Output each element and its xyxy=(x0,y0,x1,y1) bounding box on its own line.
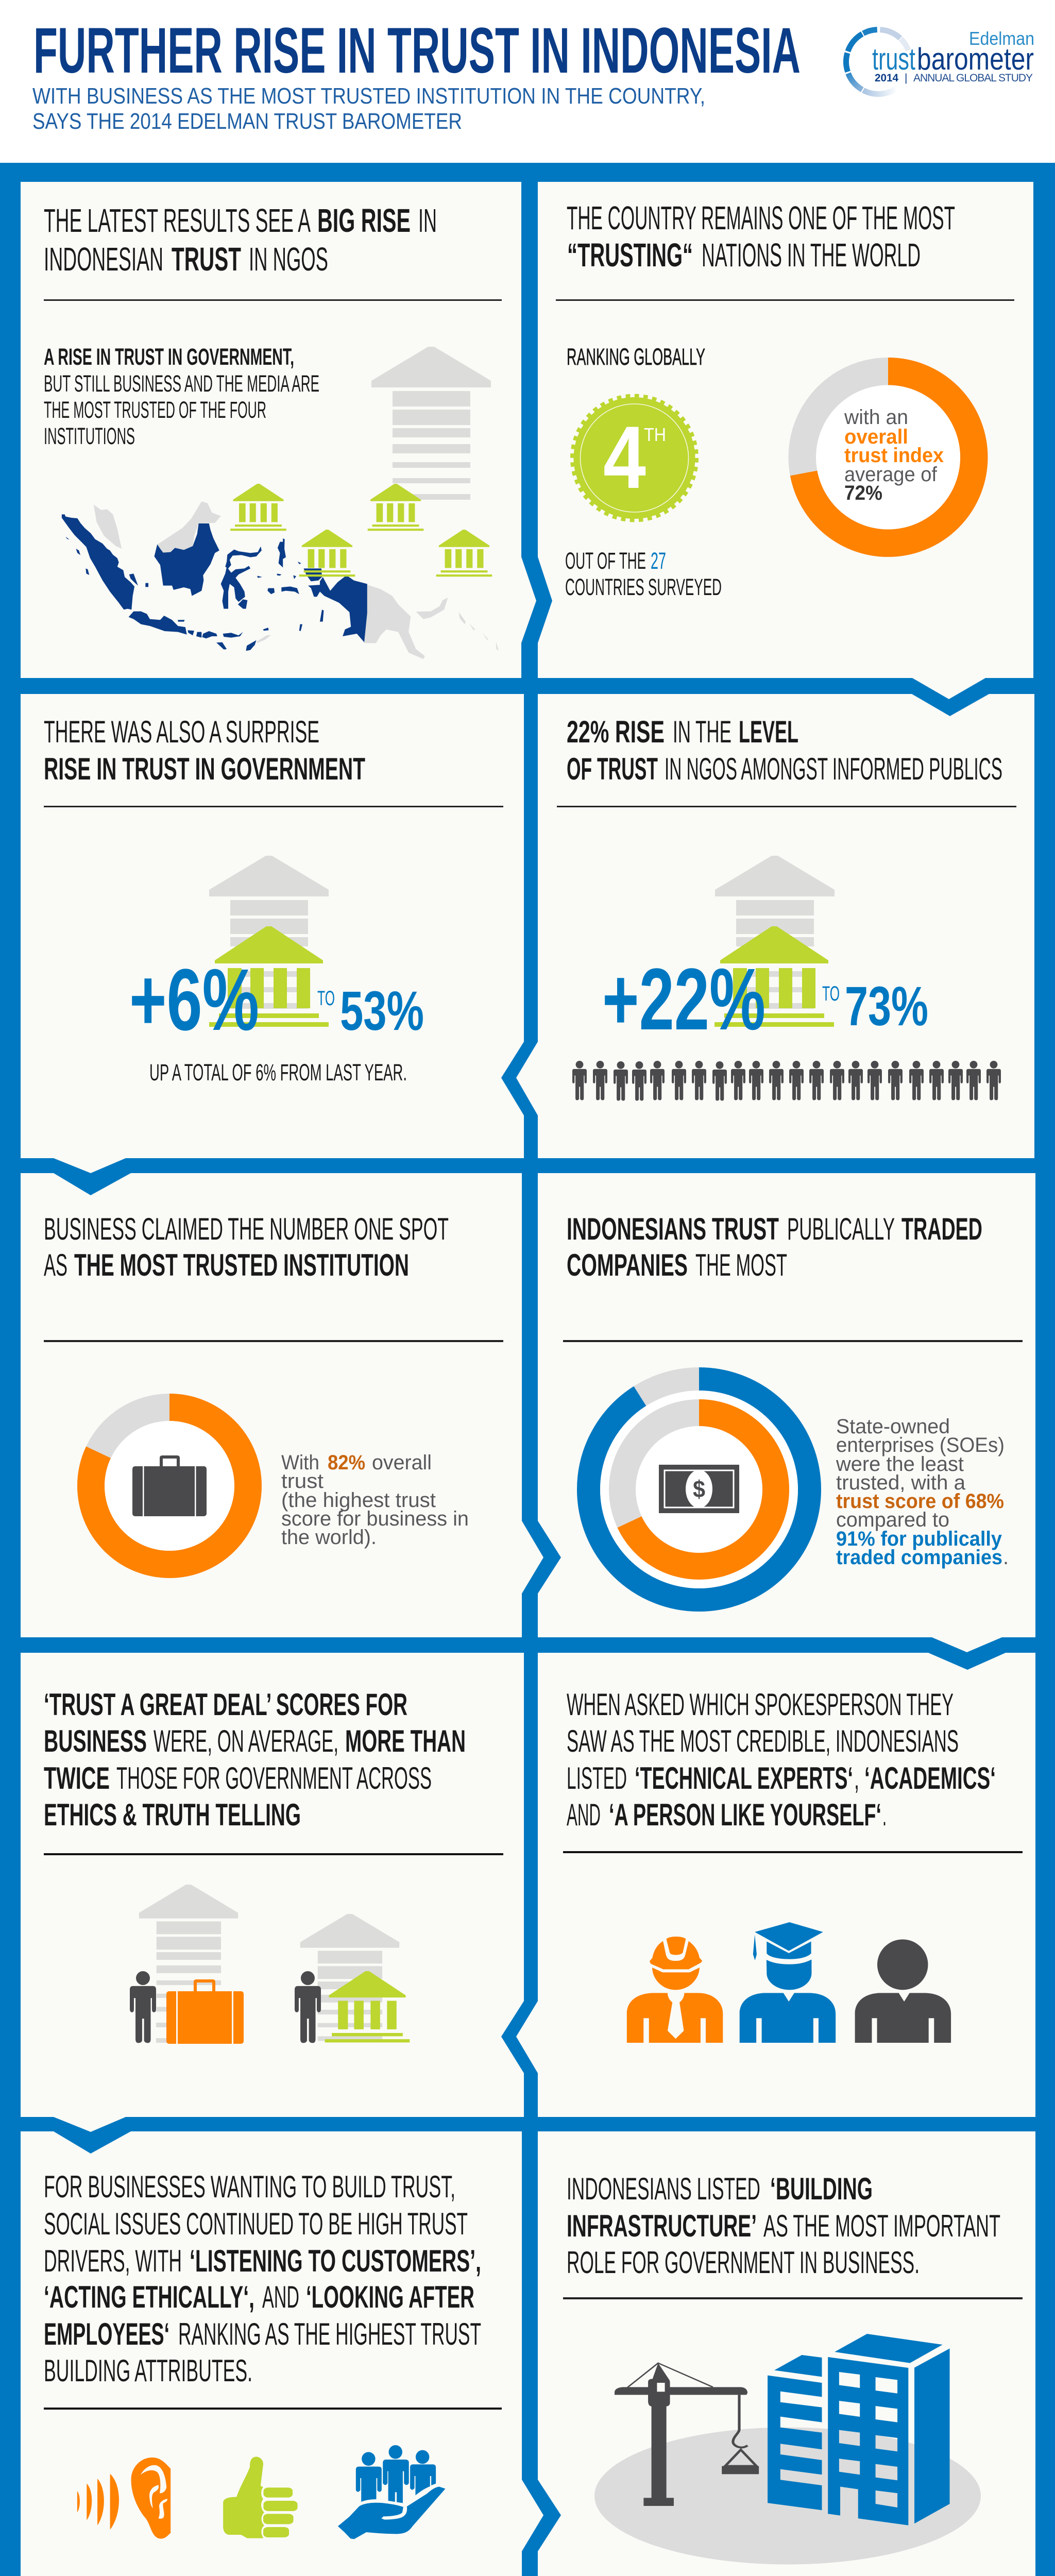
heading: 22% RISE xyxy=(567,715,665,749)
body text: BUT STILL BUSINESS AND THE MEDIA ARE xyxy=(44,370,319,397)
logo wordmark: 2014 xyxy=(875,72,898,84)
chart note: enterprises (SOEs) xyxy=(836,1434,1005,1456)
heading: RANKING AS THE HIGHEST TRUST xyxy=(178,2317,481,2351)
header background xyxy=(0,0,1055,163)
panel: trusting nations xyxy=(538,182,1033,699)
panel: rise in trust in NGOs among informed publics xyxy=(516,694,1034,1158)
stat: +6% to 53% xyxy=(129,951,424,1049)
heading: ‘LISTENING TO CUSTOMERS’, xyxy=(190,2244,481,2278)
panel background xyxy=(21,1173,543,1637)
panel background xyxy=(538,2131,1035,2576)
icons: crane and office building xyxy=(615,2334,950,2526)
gray arrow xyxy=(300,1914,399,2041)
heading xyxy=(44,1212,449,1282)
donut note: the world). xyxy=(281,1526,377,1549)
panel background xyxy=(21,182,536,678)
stat: +6% to 53%: 53% xyxy=(340,979,424,1042)
heading: , xyxy=(854,1761,859,1795)
heading xyxy=(567,1687,996,1832)
person xyxy=(130,1971,156,2043)
icon: briefcase xyxy=(132,1455,207,1516)
heading: . xyxy=(882,1798,887,1832)
heading: THE MOST xyxy=(695,1248,787,1282)
logo ring xyxy=(846,30,908,94)
stat: +6% to 53%: TO xyxy=(317,987,335,1010)
stat: +6% to 53%: +6% xyxy=(129,951,259,1049)
icon: crane xyxy=(615,2363,759,2506)
heading xyxy=(44,202,437,278)
heading: AS xyxy=(44,1248,67,1282)
donut label: average of xyxy=(844,463,938,486)
ranking label: RANKING GLOBALLY xyxy=(567,344,705,370)
stat: +22% to 73%: 73% xyxy=(845,975,928,1037)
heading: ‘A PERSON LIKE YOURSELF‘ xyxy=(609,1798,881,1832)
note: out of 27 countries: COUNTRIES SURVEYED xyxy=(565,574,722,600)
stat: +22% to 73%: TO xyxy=(822,982,840,1005)
panel background xyxy=(538,182,1033,699)
heading xyxy=(567,2172,1000,2280)
icon: gray rising arrow xyxy=(371,347,491,500)
heading: AND xyxy=(567,1798,601,1832)
chart note: traded companies xyxy=(836,1546,1002,1569)
icon: banknote: $ xyxy=(693,1476,705,1502)
icons: spokespeople xyxy=(627,1922,951,2043)
icon row: informed public people xyxy=(572,1061,1001,1100)
heading: IN THE xyxy=(673,715,731,749)
logo wordmark: ANNUAL GLOBAL STUDY xyxy=(913,72,1033,84)
person xyxy=(295,1971,321,2043)
donut label xyxy=(844,406,944,504)
heading: INDONESIANS LISTED xyxy=(567,2172,760,2206)
heading: TRADED xyxy=(901,1212,982,1246)
panel background xyxy=(538,1173,1035,1652)
caption: UP A TOTAL OF 6% FROM LAST YEAR. xyxy=(149,1059,407,1086)
panel background xyxy=(516,694,1034,1158)
icons: ear, thumb, caring hand xyxy=(77,2445,446,2539)
heading: LISTED xyxy=(567,1761,627,1795)
heading: ETHICS & TRUTH TELLING xyxy=(44,1798,301,1832)
donut note: score for business in xyxy=(281,1507,469,1530)
heading: EMPLOYEES‘ xyxy=(44,2317,169,2351)
heading: THE LATEST RESULTS SEE A xyxy=(44,202,311,239)
logo wordmark: Edelman xyxy=(969,28,1034,49)
heading: PUBLICALLY xyxy=(787,1212,895,1246)
heading: ‘TECHNICAL EXPERTS‘ xyxy=(635,1761,853,1795)
chart note: were the least xyxy=(836,1453,964,1476)
gray arrow xyxy=(139,1885,238,2043)
icon: academic xyxy=(740,1922,836,2043)
heading: ‘TRUST A GREAT DEAL’ SCORES FOR xyxy=(44,1687,407,1722)
heading: BUSINESS xyxy=(44,1724,147,1758)
badge: 4th: 4 xyxy=(603,408,646,507)
heading: AND xyxy=(262,2280,299,2314)
ground ellipse xyxy=(594,2428,981,2565)
body text: A RISE IN TRUST IN GOVERNMENT, xyxy=(44,344,294,370)
heading: THERE WAS ALSO A SURPRISE xyxy=(44,715,319,749)
stat: +22% to 73%: +22% xyxy=(602,951,765,1048)
heading: OF TRUST xyxy=(567,752,658,786)
icon: government arrow with person and building xyxy=(295,1914,410,2043)
body text: INSTITUTIONS xyxy=(44,423,135,449)
donut note: trust xyxy=(281,1470,324,1493)
heading: INDONESIAN xyxy=(44,241,163,278)
donut note: overall xyxy=(372,1451,432,1474)
panel: trust building attributes xyxy=(21,2131,543,2576)
heading: BUSINESS CLAIMED THE NUMBER ONE SPOT xyxy=(44,1212,449,1246)
panel: credible spokespeople xyxy=(516,1653,1035,2117)
suitcase xyxy=(166,1979,244,2044)
icon: person like yourself xyxy=(855,1939,951,2043)
heading: RISE IN TRUST IN GOVERNMENT xyxy=(44,752,365,786)
heading: ‘BUILDING xyxy=(770,2172,873,2206)
body text: THE MOST TRUSTED OF THE FOUR xyxy=(44,397,266,423)
donut note: 82% xyxy=(328,1451,365,1474)
logo wordmark: | xyxy=(905,72,907,84)
subtitle xyxy=(32,83,705,134)
heading: TRUST xyxy=(172,241,241,278)
donut chart: 82% xyxy=(77,1394,262,1578)
badge: 4th xyxy=(573,396,696,520)
donut note: With xyxy=(281,1451,319,1474)
heading: TWICE xyxy=(44,1761,110,1795)
icon: institution building xyxy=(714,926,834,1027)
heading: LEVEL xyxy=(739,715,798,749)
icon: thumbs up xyxy=(223,2457,298,2538)
heading: INDONESIANS TRUST xyxy=(567,1212,779,1246)
subtitle: WITH BUSINESS AS THE MOST TRUSTED INSTITUTION IN THE COUNTRY, xyxy=(32,83,705,109)
chart note: 91% for publically xyxy=(836,1528,1002,1550)
panel background xyxy=(21,2131,543,2576)
heading: THE MOST TRUSTED INSTITUTION xyxy=(74,1248,409,1282)
icon: technical expert xyxy=(627,1937,723,2043)
map of Indonesia xyxy=(62,501,499,659)
donut note xyxy=(281,1451,469,1549)
chart note: compared to xyxy=(836,1509,949,1531)
donut chart: 72% xyxy=(788,358,988,557)
logo: Edelman trust barometer xyxy=(846,28,1034,94)
icon: government building xyxy=(209,926,329,1027)
icon: gray rising arrow xyxy=(209,856,329,1009)
note: out of 27 countries: 27 xyxy=(651,548,666,574)
donut label: overall xyxy=(844,426,908,448)
icon: business arrow with person and suitcase xyxy=(130,1885,244,2044)
heading: DRIVERS, WITH xyxy=(44,2244,182,2278)
chart note: trusted, with a xyxy=(836,1471,966,1494)
heading: MORE THAN xyxy=(345,1724,466,1758)
building xyxy=(325,1971,410,2042)
note: out of 27 countries: OUT OF THE xyxy=(565,548,646,574)
donut label: 72% xyxy=(844,482,882,504)
chart note xyxy=(836,1415,1009,1569)
panel: publicly traded companies xyxy=(538,1173,1035,1652)
panel background xyxy=(21,694,524,1173)
heading xyxy=(44,1687,466,1832)
donut label: trust index xyxy=(844,444,944,467)
heading xyxy=(567,199,955,274)
heading: WERE, ON AVERAGE, xyxy=(154,1724,338,1758)
panel: trust a great deal xyxy=(21,1653,524,2132)
double donut chart: 91% and 68% xyxy=(577,1367,821,1612)
heading xyxy=(567,715,1002,786)
icon: gray rising arrow xyxy=(715,856,835,1009)
heading: SOCIAL ISSUES CONTINUED TO BE HIGH TRUST xyxy=(44,2207,468,2241)
heading: IN xyxy=(418,202,437,239)
panel: rise in trust in government xyxy=(21,694,524,1173)
Indonesia in navy xyxy=(62,514,367,651)
donut note: (the highest trust xyxy=(281,1489,436,1512)
heading: THOSE FOR GOVERNMENT ACROSS xyxy=(116,1761,432,1795)
heading xyxy=(44,2170,481,2388)
panel background xyxy=(516,1653,1035,2117)
note: out of 27 countries xyxy=(565,548,722,600)
panel: building infrastructure xyxy=(538,2131,1035,2576)
heading: IN NGOS xyxy=(249,241,328,278)
icon: ear listening xyxy=(77,2458,171,2539)
icons: green institutions xyxy=(230,484,492,577)
stat: +22% to 73% xyxy=(602,951,928,1048)
heading: INFRASTRUCTURE’ xyxy=(567,2209,757,2243)
chart note: State-owned xyxy=(836,1415,950,1438)
heading xyxy=(44,715,365,786)
subtitle: SAYS THE 2014 EDELMAN TRUST BAROMETER xyxy=(32,109,462,134)
heading: COMPANIES xyxy=(567,1248,688,1282)
icon: people in a caring hand xyxy=(338,2445,446,2539)
logo wordmark xyxy=(872,28,1034,84)
heading: ‘ACTING ETHICALLY‘, xyxy=(44,2280,254,2314)
logo wordmark: barometer xyxy=(917,42,1034,76)
heading: ‘LOOKING AFTER xyxy=(306,2280,474,2314)
logo wordmark: trust xyxy=(872,42,915,76)
panel background xyxy=(21,1653,524,2132)
heading: “TRUSTING“ xyxy=(567,236,693,274)
body text xyxy=(44,344,319,449)
heading: FOR BUSINESSES WANTING TO BUILD TRUST, xyxy=(44,2170,455,2204)
chart note: trust score of 68% xyxy=(836,1490,1004,1513)
badge: 4th: TH xyxy=(644,424,666,445)
panel: big rise in NGOs xyxy=(21,182,536,678)
heading: BIG RISE xyxy=(317,202,411,239)
neighbouring land in gray xyxy=(94,501,499,659)
icon: office building xyxy=(768,2334,950,2526)
donut label: with an xyxy=(844,406,908,429)
heading xyxy=(567,1212,982,1282)
chart note: . xyxy=(1003,1546,1009,1569)
heading: BUILDING ATTRIBUTES. xyxy=(44,2353,252,2388)
panel: business most trusted institution xyxy=(21,1173,543,1637)
icon: banknote xyxy=(659,1465,739,1513)
